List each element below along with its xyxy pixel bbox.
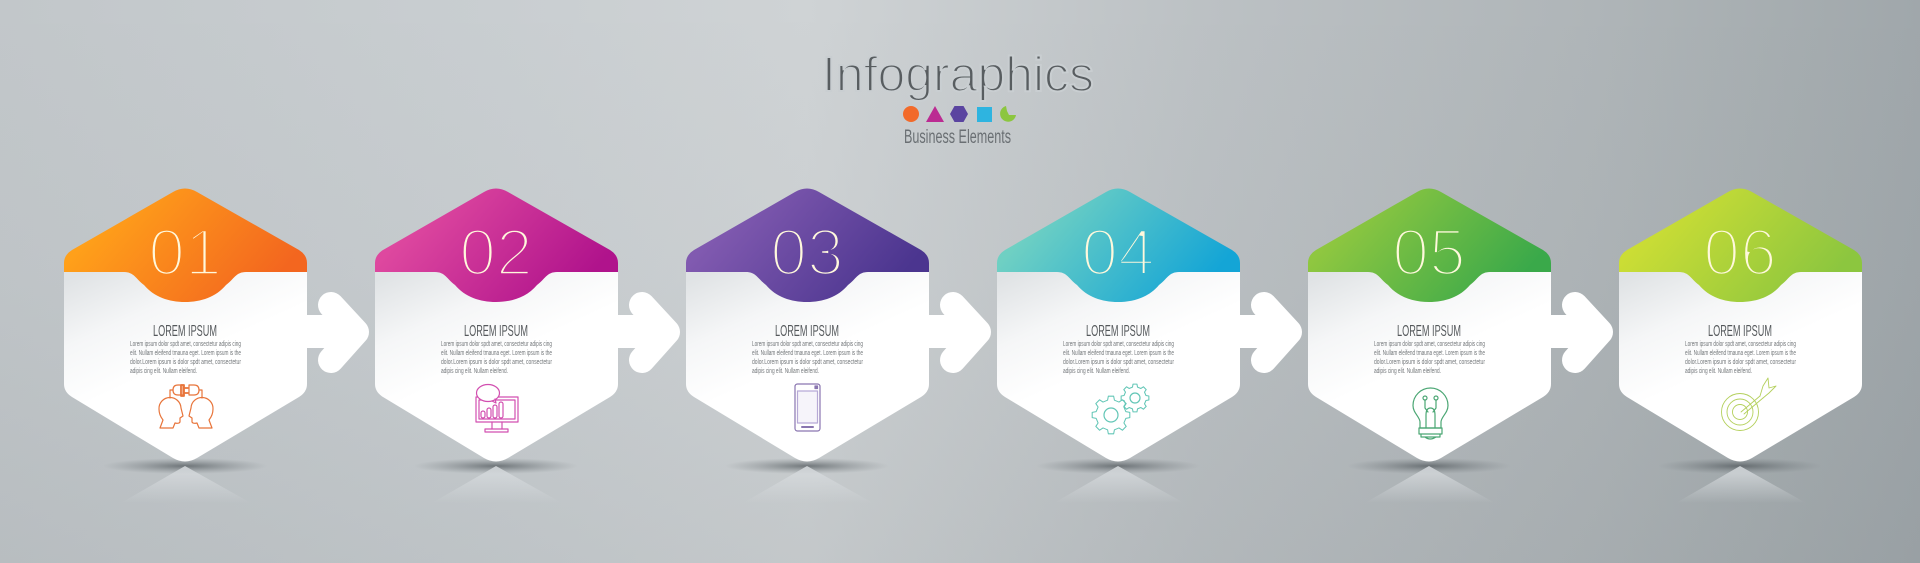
number: 05 xyxy=(1392,215,1466,289)
heading: LOREM IPSUM xyxy=(775,323,839,340)
description: adipis cing elit. Nullam eleifend. xyxy=(130,366,197,375)
heading: LOREM IPSUM xyxy=(153,323,217,340)
arrow xyxy=(307,305,356,360)
colour header xyxy=(64,188,307,302)
description: elit. Nullam eleifend tmauna eget. Lorem ipsum is the xyxy=(130,348,241,357)
arrow xyxy=(618,305,667,360)
shadow and reflection xyxy=(1347,458,1511,503)
heading: LOREM IPSUM xyxy=(1086,323,1150,340)
description: elit. Nullam eleifend tmauna eget. Lorem ipsum is the xyxy=(1374,348,1485,357)
description xyxy=(1063,339,1174,375)
title: Infographics xyxy=(822,48,1094,102)
hexagon body xyxy=(1619,272,1862,462)
number: 04 xyxy=(1081,215,1155,289)
shadow and reflection xyxy=(103,458,267,503)
colour header xyxy=(1619,188,1862,302)
description: dolor.Lorem ipsum is dolor spdt amet, consectetur xyxy=(1374,357,1485,366)
hexagon body xyxy=(64,272,307,462)
icon: target with arrow xyxy=(1722,378,1776,430)
subtitle: Business Elements xyxy=(904,127,1011,148)
description: Lorem ipsum dolor spdt amet, consectetur adipis cing xyxy=(1063,339,1174,348)
description: adipis cing elit. Nullam eleifend. xyxy=(1063,366,1130,375)
step 3 card xyxy=(686,188,978,503)
colour header xyxy=(1308,188,1551,302)
number: 02 xyxy=(459,215,533,289)
step 1 card xyxy=(64,188,356,503)
icon: two heads with plug xyxy=(159,385,213,428)
heading: LOREM IPSUM xyxy=(464,323,528,340)
icon: smartphone xyxy=(795,384,820,431)
description: adipis cing elit. Nullam eleifend. xyxy=(441,366,508,375)
description: Lorem ipsum dolor spdt amet, consectetur adipis cing xyxy=(1685,339,1796,348)
description: adipis cing elit. Nullam eleifend. xyxy=(1685,366,1752,375)
hexagon body xyxy=(997,272,1240,462)
number: 06 xyxy=(1703,215,1777,289)
shadow and reflection xyxy=(725,458,889,503)
description: elit. Nullam eleifend tmauna eget. Lorem ipsum is the xyxy=(752,348,863,357)
colour header xyxy=(375,188,618,302)
description: elit. Nullam eleifend tmauna eget. Lorem ipsum is the xyxy=(441,348,552,357)
description xyxy=(1374,339,1485,375)
description: dolor.Lorem ipsum is dolor spdt amet, consectetur xyxy=(1685,357,1796,366)
colour header xyxy=(997,188,1240,302)
arrow xyxy=(929,305,978,360)
heading: LOREM IPSUM xyxy=(1708,323,1772,340)
hexagon body xyxy=(686,272,929,462)
arrow xyxy=(1551,305,1600,360)
description: adipis cing elit. Nullam eleifend. xyxy=(752,366,819,375)
description: dolor.Lorem ipsum is dolor spdt amet, consectetur xyxy=(130,357,241,366)
description xyxy=(1685,339,1796,375)
number: 03 xyxy=(770,215,844,289)
heading: LOREM IPSUM xyxy=(1397,323,1461,340)
step 6 card xyxy=(1619,188,1862,503)
step 5 card xyxy=(1308,188,1600,503)
description xyxy=(752,339,863,375)
step 2 card xyxy=(375,188,667,503)
description: Lorem ipsum dolor spdt amet, consectetur adipis cing xyxy=(1374,339,1485,348)
description xyxy=(130,339,241,375)
shadow and reflection xyxy=(414,458,578,503)
number: 01 xyxy=(148,215,222,289)
description: Lorem ipsum dolor spdt amet, consectetur adipis cing xyxy=(441,339,552,348)
colour header xyxy=(686,188,929,302)
icon row: shapes xyxy=(903,106,1016,122)
description: adipis cing elit. Nullam eleifend. xyxy=(1374,366,1441,375)
icon: light bulb xyxy=(1413,388,1448,439)
step 4 card xyxy=(997,188,1289,503)
description: Lorem ipsum dolor spdt amet, consectetur adipis cing xyxy=(130,339,241,348)
description: dolor.Lorem ipsum is dolor spdt amet, consectetur xyxy=(1063,357,1174,366)
description: Lorem ipsum dolor spdt amet, consectetur adipis cing xyxy=(752,339,863,348)
icon: gears xyxy=(1092,384,1149,434)
icon: monitor with chart and speech bubble xyxy=(476,384,518,432)
description: elit. Nullam eleifend tmauna eget. Lorem ipsum is the xyxy=(1063,348,1174,357)
description: dolor.Lorem ipsum is dolor spdt amet, consectetur xyxy=(441,357,552,366)
hexagon body xyxy=(375,272,618,462)
shadow and reflection xyxy=(1036,458,1200,503)
description xyxy=(441,339,552,375)
arrow xyxy=(1240,305,1289,360)
description: dolor.Lorem ipsum is dolor spdt amet, consectetur xyxy=(752,357,863,366)
hexagon body xyxy=(1308,272,1551,462)
shadow and reflection xyxy=(1658,458,1822,503)
description: elit. Nullam eleifend tmauna eget. Lorem ipsum is the xyxy=(1685,348,1796,357)
